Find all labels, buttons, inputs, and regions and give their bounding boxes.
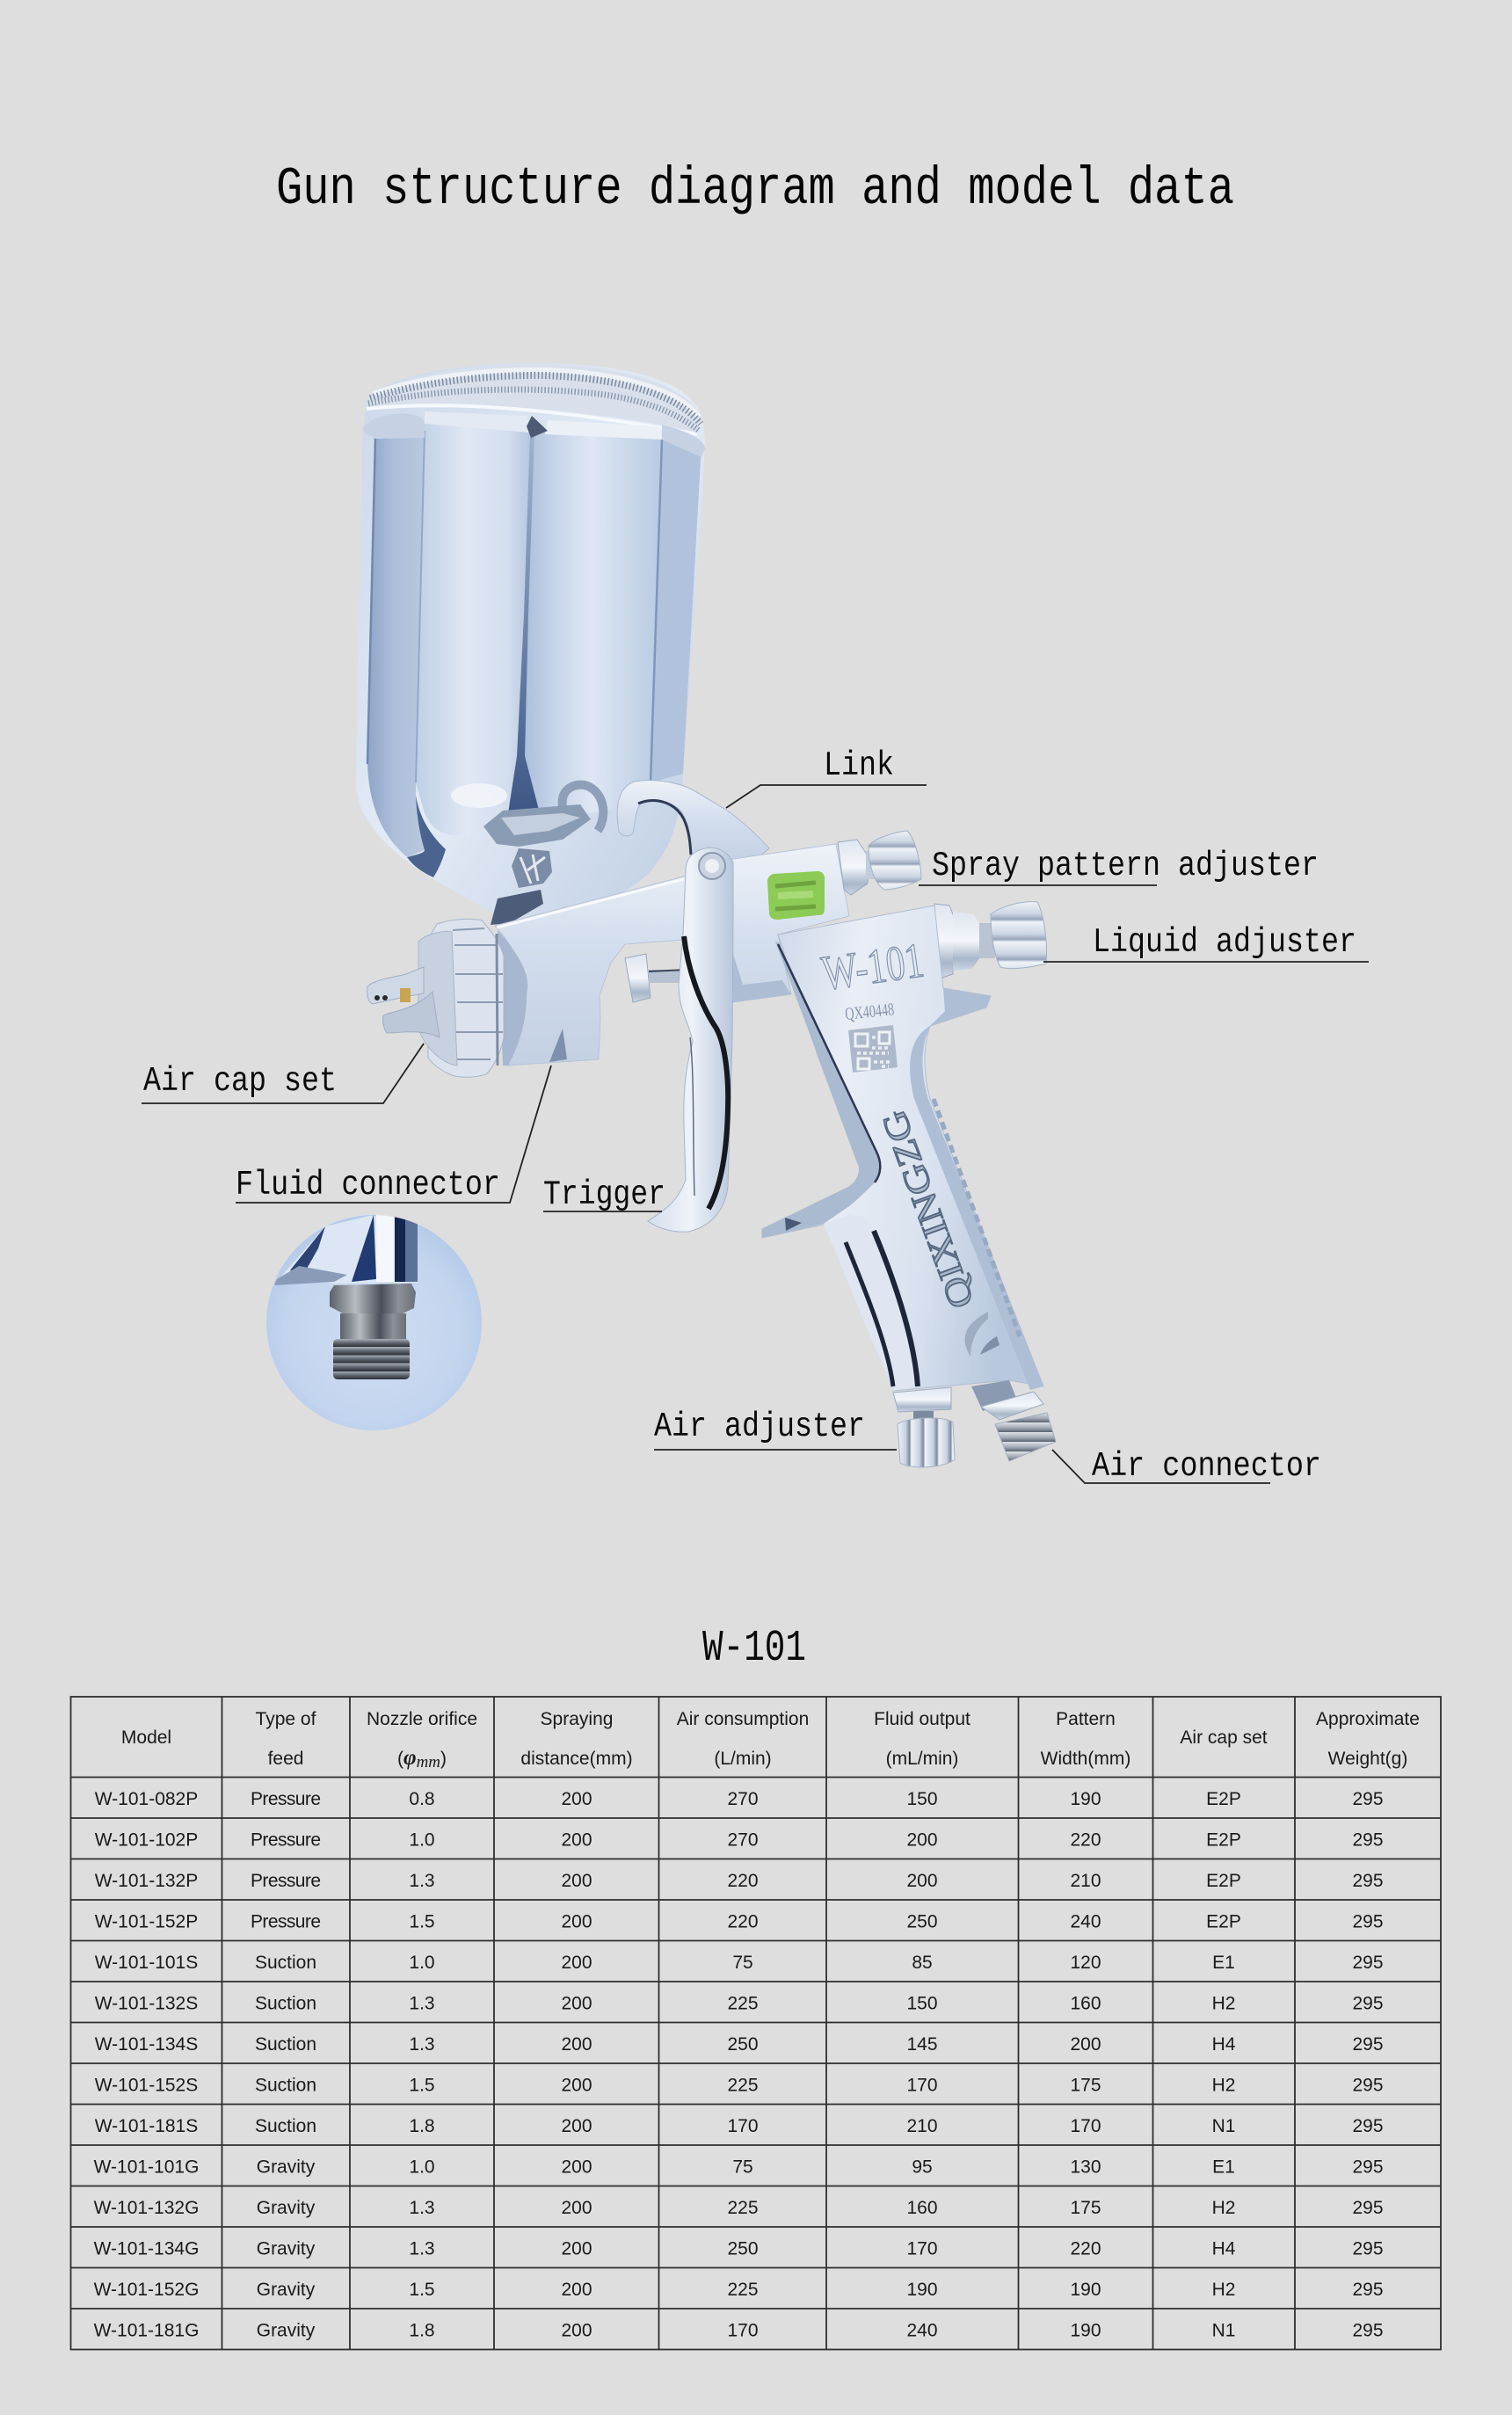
row W-101-102P: Pressure [251,1830,321,1850]
specification table [70,1697,1441,2349]
row W-101-152G: 225 [727,2280,759,2300]
table header: Type of [256,1709,316,1729]
row W-101-181G: N1 [1212,2321,1235,2340]
reflected filter and hook [483,785,603,925]
spray gun illustration [356,363,1056,1467]
row W-101-181G: W-101-181G [94,2321,199,2340]
row W-101-152P: 250 [906,1911,938,1932]
row W-101-132G [94,2198,1384,2218]
row W-101-132S: 160 [1070,1994,1101,2013]
label: Fluid connector [236,1066,551,1204]
row W-101-132G: 1.3 [409,2198,435,2218]
row W-101-132S: Suction [255,1994,316,2013]
row W-101-152G: 190 [906,2280,938,2300]
row W-101-152S: 225 [727,2075,759,2096]
row W-101-101G: 75 [732,2157,753,2177]
needle stem [625,954,687,1002]
row W-101-134G: 295 [1352,2238,1384,2259]
row W-101-102P: 1.0 [409,1830,435,1850]
row W-101-152S [95,2075,1384,2096]
row W-101-101S: 85 [912,1953,933,1973]
row W-101-181S: 295 [1352,2116,1384,2136]
row W-101-181G: 240 [906,2321,938,2340]
table header: mm [417,1753,440,1771]
row W-101-152P [95,1911,1384,1932]
paint cup [356,363,705,932]
table grid [70,1697,1441,2349]
table header [121,1709,1420,1771]
table header: Fluid output [874,1709,970,1729]
row W-101-181G: Gravity [257,2321,316,2340]
row W-101-132P: E2P [1206,1871,1241,1891]
label: Air connector: Air connector [1092,1447,1321,1486]
row W-101-181G: 295 [1352,2321,1384,2340]
row W-101-181G [94,2321,1384,2340]
gun barrel body [495,844,849,1066]
label: Link: Link [824,746,894,785]
row W-101-102P [95,1830,1384,1850]
nozzle air cap [367,919,527,1077]
row W-101-101S: E1 [1212,1953,1235,1973]
row W-101-101G: W-101-101G [94,2157,199,2177]
row W-101-082P: 200 [561,1789,592,1809]
row W-101-134S: 200 [561,2034,592,2055]
row W-101-152P: 200 [561,1911,592,1932]
row W-101-132S: H2 [1212,1994,1235,2013]
row W-101-132S: W-101-132S [95,1994,198,2013]
row W-101-152S: W-101-152S [95,2075,198,2096]
row W-101-132S: 150 [906,1994,938,2013]
handle engraved model: W-101 [818,933,927,1001]
label: Air adjuster: Air adjuster [654,1408,865,1446]
row W-101-134S: W-101-134S [95,2034,198,2055]
row W-101-132P: Pressure [251,1871,321,1891]
row W-101-152G: 1.5 [409,2280,435,2300]
row W-101-152G: 200 [561,2280,592,2300]
row W-101-134S [95,2034,1384,2055]
row W-101-082P: E2P [1206,1789,1241,1809]
row W-101-152G [94,2280,1384,2300]
row W-101-101G: 95 [912,2157,933,2177]
row W-101-152P: E2P [1206,1911,1241,1932]
row W-101-181G: 190 [1070,2321,1101,2340]
row W-101-101G: E1 [1212,2157,1235,2177]
row W-101-132P: 295 [1352,1871,1384,1891]
row W-101-134G: 220 [1070,2238,1101,2259]
row W-101-134S: Suction [255,2034,316,2055]
row W-101-181S: 200 [561,2116,592,2136]
row W-101-132G: H2 [1212,2198,1235,2218]
row W-101-152S: 1.5 [409,2075,435,2096]
row W-101-132G: 225 [727,2198,759,2218]
table header: Nozzle orifice [367,1709,477,1729]
row W-101-152S: 170 [906,2075,938,2096]
row W-101-101G: Gravity [257,2157,316,2177]
table header: Width(mm) [1041,1749,1130,1769]
green label [767,871,825,920]
row W-101-132P: 210 [1070,1871,1101,1891]
table header: Pattern [1056,1709,1116,1729]
row W-101-181S: 170 [1070,2116,1101,2136]
row W-101-101G: 295 [1352,2157,1384,2177]
row W-101-132P [95,1871,1384,1891]
gun link arm [617,781,769,866]
row W-101-101S: 200 [561,1953,592,1973]
row W-101-134G: 170 [906,2238,938,2259]
fluid connector detail circle [266,1215,482,1430]
row W-101-101S: Suction [255,1953,316,1973]
label: Air cap set [142,1044,424,1103]
row W-101-132P: 200 [561,1871,592,1891]
row W-101-152S: 295 [1352,2075,1384,2096]
table header: distance(mm) [520,1749,633,1769]
row W-101-102P: 270 [727,1830,759,1850]
row W-101-134S: H4 [1212,2034,1236,2055]
table header: Approximate [1316,1709,1420,1729]
row W-101-101G: 1.0 [409,2157,435,2177]
table header: Air cap set [1180,1728,1268,1748]
table header: (L/min) [714,1749,772,1769]
label: Liquid adjuster: Liquid adjuster [1093,923,1356,962]
row W-101-181S [95,2116,1384,2136]
row W-101-152S: Suction [255,2075,316,2096]
table heading: W-101 [702,1624,806,1674]
table header: Weight(g) [1328,1749,1407,1769]
row W-101-134S: 1.3 [409,2034,435,2055]
row W-101-181G: 200 [561,2321,592,2340]
label: Fluid connector: Fluid connector [236,1166,500,1204]
row W-101-152G: 295 [1352,2280,1384,2300]
air adjuster [893,1387,955,1467]
row W-101-101G: 200 [561,2157,592,2177]
row W-101-152S: 200 [561,2075,592,2096]
row W-101-181S: W-101-181S [95,2116,198,2136]
row W-101-102P: W-101-102P [95,1830,198,1850]
row W-101-082P: 295 [1352,1789,1384,1809]
row W-101-132S [95,1994,1384,2013]
row W-101-152G: Gravity [257,2280,316,2300]
row W-101-134G: H4 [1212,2238,1236,2259]
row W-101-082P: Pressure [251,1789,321,1809]
row W-101-102P: 200 [906,1830,938,1850]
row W-101-132G: 200 [561,2198,592,2218]
table header: (φ [397,1746,417,1770]
cup rim [362,365,705,457]
row W-101-134G: 250 [727,2238,759,2259]
row W-101-102P: 220 [1070,1830,1101,1850]
row W-101-101S: 75 [732,1953,753,1973]
row W-101-152S: 175 [1070,2075,1101,2096]
row W-101-101S: 120 [1070,1953,1101,1973]
handle serial code: QX40448 [844,1000,895,1024]
row W-101-152G: H2 [1212,2280,1235,2300]
row W-101-132P: 200 [906,1871,938,1891]
spray pattern adjuster [838,831,921,895]
liquid adjuster [934,902,1047,978]
row W-101-132G: Gravity [257,2198,316,2218]
table header: Model [121,1728,171,1748]
row W-101-181G: 170 [727,2321,759,2340]
row W-101-132S: 200 [561,1994,592,2013]
row W-101-082P: 190 [1070,1789,1101,1809]
row W-101-134G: Gravity [257,2238,316,2259]
row W-101-181S: Suction [255,2116,316,2136]
label: Trigger: Trigger [543,1175,665,1214]
row W-101-134G: 1.3 [409,2238,435,2259]
row W-101-134S: 250 [727,2034,759,2055]
row W-101-152P: 220 [727,1911,759,1932]
air connector [971,1380,1056,1461]
row W-101-132G: 295 [1352,2198,1384,2218]
title: Gun structure diagram and model data [276,160,1234,220]
row W-101-132P: 220 [727,1871,759,1891]
row W-101-132G: W-101-132G [94,2198,199,2218]
row W-101-152P: 240 [1070,1911,1101,1932]
row W-101-181S: 210 [906,2116,938,2136]
handle logo mark [965,1312,1000,1357]
handle brand: QIXINGZG [873,1105,981,1313]
label: Air cap set: Air cap set [143,1062,337,1101]
row W-101-101S: W-101-101S [95,1953,198,1973]
row W-101-181S: 1.8 [409,2116,435,2136]
row W-101-152P: 1.5 [409,1911,435,1932]
QR code [848,1025,898,1073]
row W-101-101G [94,2157,1384,2177]
row W-101-132S: 225 [727,1994,759,2013]
row W-101-102P: 200 [561,1830,592,1850]
row W-101-152G: W-101-152G [94,2280,199,2300]
row W-101-101G: 130 [1070,2157,1101,2177]
row W-101-152S: H2 [1212,2075,1235,2096]
row W-101-152P: W-101-152P [95,1911,198,1932]
row W-101-134S: 145 [906,2034,938,2055]
row W-101-132S: 295 [1352,1994,1384,2013]
row W-101-132P: 1.3 [409,1871,435,1891]
row W-101-134G: 200 [561,2238,592,2259]
table header: feed [268,1749,303,1769]
label: Spray pattern adjuster: Spray pattern adjuster [932,847,1319,885]
row W-101-132G: 160 [906,2198,938,2218]
row W-101-102P: 295 [1352,1830,1384,1850]
row W-101-101S [95,1953,1384,1973]
row W-101-134G: W-101-134G [94,2238,199,2259]
row W-101-132S: 1.3 [409,1994,435,2013]
row W-101-152G: 190 [1070,2280,1101,2300]
row W-101-134S: 295 [1352,2034,1384,2055]
row W-101-152P: 295 [1352,1911,1384,1932]
table header: ) [440,1749,447,1769]
row W-101-102P: E2P [1206,1830,1241,1850]
row W-101-082P: 0.8 [409,1789,435,1809]
table header: Spraying [541,1709,613,1729]
row W-101-082P: W-101-082P [95,1789,198,1809]
row W-101-101S: 1.0 [409,1953,435,1973]
table header: Air consumption [677,1709,809,1729]
row W-101-082P: 270 [727,1789,759,1809]
table header: (mL/min) [886,1749,958,1769]
row W-101-181S: 170 [727,2116,759,2136]
row W-101-181S: N1 [1212,2116,1235,2136]
row W-101-082P: 150 [906,1789,938,1809]
row W-101-134G [94,2238,1384,2259]
row W-101-082P [95,1789,1384,1809]
trigger [648,847,733,1232]
label: Link [726,746,927,808]
row W-101-152P: Pressure [251,1911,321,1932]
row W-101-132G: 175 [1070,2198,1101,2218]
row W-101-181G: 1.8 [409,2321,435,2340]
row W-101-134S: 200 [1070,2034,1101,2055]
row W-101-101S: 295 [1352,1953,1384,1973]
row W-101-132P: W-101-132P [95,1871,198,1891]
diamond reflection [527,416,548,438]
handle [762,906,1043,1391]
